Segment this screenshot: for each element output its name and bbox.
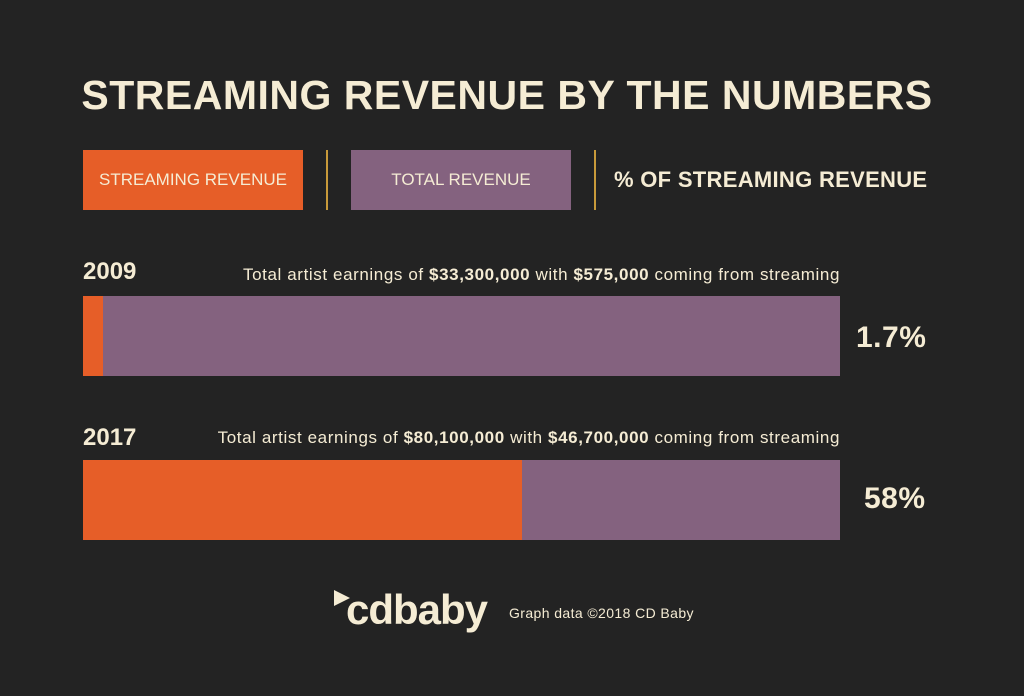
legend: percent: % OF STREAMING REVENUE xyxy=(614,167,927,192)
2017 percent: 58% xyxy=(864,482,926,515)
credit: Graph data ©2018 CD Baby xyxy=(509,605,694,621)
legend: streaming revenue: STREAMING REVENUE xyxy=(99,170,287,189)
2017 description: Total artist earnings of $80,100,000 with $46,700,000 coming from streaming xyxy=(218,428,840,447)
2017 bar xyxy=(83,460,840,540)
2009 bar xyxy=(83,296,840,376)
2009 percent: 1.7% xyxy=(856,321,926,354)
legend: total revenue xyxy=(351,150,571,210)
legend: total revenue: TOTAL REVENUE xyxy=(391,170,531,189)
title: STREAMING REVENUE BY THE NUMBERS xyxy=(81,72,933,118)
logo: cdbaby xyxy=(346,586,487,633)
legend: streaming revenue xyxy=(83,150,303,210)
2009 year: 2009 xyxy=(83,258,136,285)
2009 description: Total artist earnings of $33,300,000 with $575,000 coming from streaming xyxy=(243,265,840,284)
2017 year: 2017 xyxy=(83,424,136,451)
